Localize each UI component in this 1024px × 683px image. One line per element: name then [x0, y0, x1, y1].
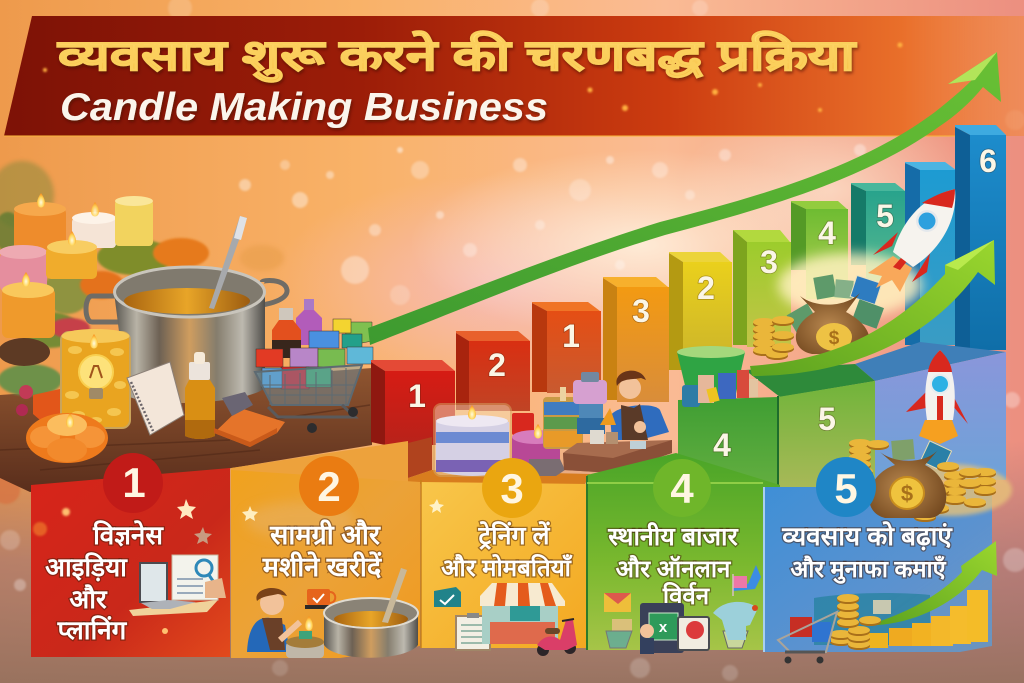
green block 5	[745, 364, 875, 397]
bar 9	[905, 162, 956, 345]
icon: teal shelf	[814, 593, 930, 645]
rising arrow: lower green	[750, 240, 995, 376]
money bag upper	[753, 253, 922, 360]
bar 6: 3	[760, 244, 778, 280]
title banner	[4, 16, 1024, 136]
panel 2: materials and machines	[231, 456, 420, 658]
glass candle	[434, 404, 511, 476]
blue block	[855, 342, 1006, 381]
lower blocks 4 5	[678, 342, 1006, 490]
number badge	[816, 457, 876, 517]
panel text: विज्ञनेस	[92, 520, 164, 550]
bar 7: 4	[818, 215, 836, 251]
wooden table	[0, 368, 372, 492]
bar 8: 5	[876, 198, 894, 234]
panel text: विर्वन	[662, 582, 711, 610]
icon: shopping cart	[778, 612, 837, 664]
icon: flag	[733, 565, 761, 596]
bar 2: 2	[488, 347, 506, 383]
icon: laptop and report on desk	[129, 555, 226, 616]
soap bar	[214, 408, 285, 447]
bar 5: 2	[697, 270, 715, 306]
icon: craftsman	[247, 588, 300, 652]
icon: tablet	[678, 617, 709, 650]
body	[893, 189, 955, 267]
number badge: 2	[317, 463, 341, 510]
panel text: मशीने खरीदें	[262, 551, 383, 582]
number badge	[299, 456, 359, 516]
bar 10: 6	[979, 143, 997, 179]
panel text: स्थानीय बाजार	[607, 522, 740, 551]
striped candle	[543, 387, 583, 449]
icon: envelope folder	[604, 593, 631, 612]
panel text	[607, 522, 740, 610]
bar staircase back row	[371, 125, 1006, 445]
bar 6	[733, 230, 791, 347]
green block 4	[678, 397, 778, 487]
lower blocks 4 5: 5	[818, 401, 836, 437]
panel text: आइड़िया	[45, 552, 128, 582]
grey stone	[222, 392, 253, 416]
bar 3: 1	[562, 318, 580, 354]
icon: checklist mug	[305, 589, 335, 609]
icon: clipboard	[456, 613, 490, 650]
orange box	[33, 389, 60, 420]
panel 4: local market and online sales	[587, 453, 780, 654]
panel text: सामग्री और	[269, 519, 381, 550]
panel text: और मुनाफा कमाएँ	[790, 555, 947, 584]
main title: व्यवसाय शुरू करने की चरणबद्ध प्रक्रिया	[57, 30, 857, 83]
number badge	[653, 459, 711, 517]
bills	[787, 274, 884, 333]
pink candle	[512, 424, 560, 466]
icon: laptop	[640, 603, 684, 654]
panel text: और	[69, 584, 108, 614]
icon: mascot	[713, 602, 758, 640]
bar 2	[456, 331, 530, 411]
sack	[796, 293, 870, 354]
bar 10	[955, 125, 1006, 350]
panel text: व्यवसाय को बढ़ाएं	[781, 521, 953, 551]
subtitle: Candle Making Business	[60, 86, 548, 129]
light bulb jar	[61, 329, 130, 428]
panel text: और मोमबतियाँ	[441, 554, 573, 582]
banner shape	[4, 16, 1024, 136]
panel text: ट्रेनिंग लें	[478, 521, 551, 550]
bar 1	[371, 360, 455, 445]
coins	[753, 316, 794, 360]
table and candle workshop scene	[0, 161, 373, 492]
money bag upper: $	[829, 328, 840, 349]
rocket lower	[906, 350, 968, 444]
glow	[778, 253, 922, 317]
panel 3: training and candles	[421, 458, 587, 656]
money bag lower: $	[901, 481, 913, 506]
icon: small carts	[606, 619, 748, 648]
rocket upper	[868, 189, 955, 292]
green cup of supplies	[677, 346, 758, 407]
bar 4	[603, 277, 669, 402]
icon: red scooter	[537, 619, 577, 656]
number badge: 4	[670, 465, 694, 512]
icon: green growth arrow	[877, 541, 997, 625]
fins	[873, 232, 930, 282]
workbench	[563, 440, 672, 473]
shopping basket with wax cubes	[255, 319, 373, 433]
background greenery	[0, 161, 284, 416]
cooking pot	[86, 216, 287, 403]
flame	[868, 256, 912, 292]
candle group centre	[231, 371, 672, 486]
panel text	[45, 520, 164, 645]
back candles	[0, 193, 153, 366]
lower blocks 4 5: 4	[713, 427, 731, 463]
money bag lower	[849, 439, 1012, 522]
bar 8	[851, 183, 906, 281]
panel text: प्लानिंग	[57, 615, 128, 645]
icon: laptop: x	[659, 619, 668, 636]
red candle	[512, 413, 534, 435]
chart: gold bars	[868, 590, 988, 648]
icon: check folder	[434, 587, 461, 607]
purple jar	[573, 372, 607, 434]
bar 5	[669, 252, 732, 372]
icon: small melting dish	[286, 616, 324, 658]
panel 1: business idea and planning	[31, 453, 230, 657]
bar 4: 3	[632, 293, 650, 329]
bar 1: 1	[408, 378, 426, 414]
number badge: 1	[122, 459, 146, 506]
icon: shop stall	[480, 583, 565, 644]
number badge	[103, 453, 163, 513]
panel text	[262, 519, 383, 582]
notebook	[127, 362, 184, 435]
bar 7	[791, 201, 848, 299]
oil bottle	[185, 352, 215, 439]
stone dish	[528, 459, 565, 476]
icon: gold coins	[830, 594, 881, 650]
panel 5: grow the business and earn profit	[763, 439, 1012, 664]
panel text	[441, 521, 573, 582]
icon: steel pot and spoon	[324, 568, 418, 658]
craftsman	[600, 371, 669, 440]
number badge: 5	[834, 465, 858, 512]
base orange step	[231, 441, 421, 484]
number badge: 3	[500, 465, 524, 512]
bottles of dye	[272, 299, 322, 358]
rising arrow: long top	[368, 52, 1001, 345]
panel text	[781, 521, 953, 584]
number badge	[482, 458, 542, 518]
lotus candle	[26, 413, 108, 463]
bar 3	[532, 302, 601, 393]
panel text: और ऑनलान	[616, 555, 732, 583]
